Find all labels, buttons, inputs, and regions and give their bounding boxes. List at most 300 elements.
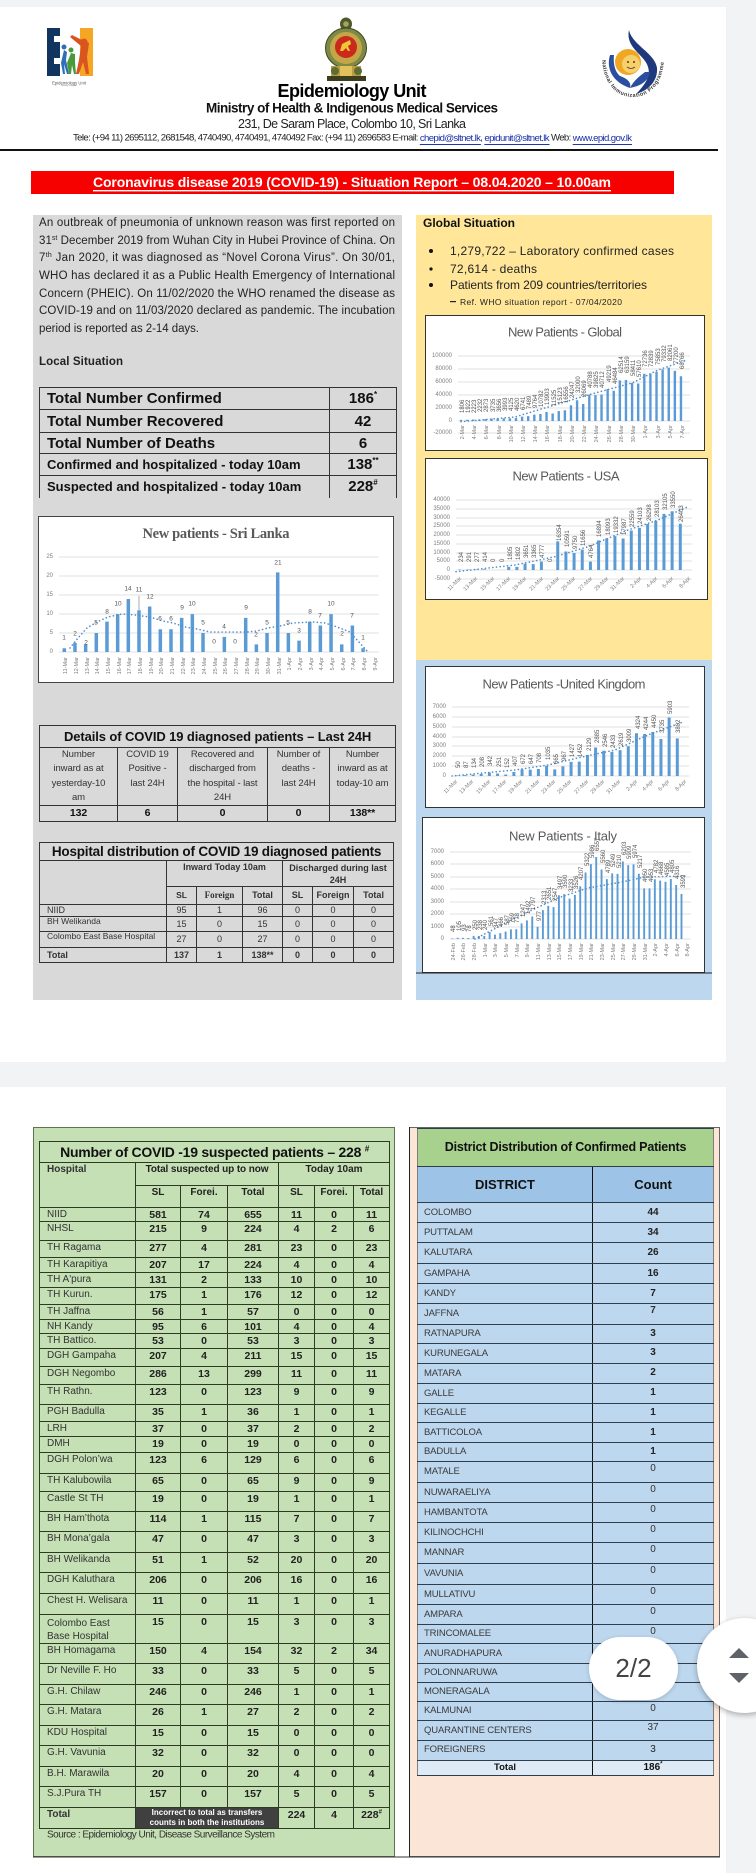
chart: new patients global: 2873 bbox=[484, 398, 490, 412]
chart: new patients global: 11525 bbox=[552, 389, 558, 406]
table: district distribution of confirmed patients: 1 bbox=[650, 1407, 656, 1418]
table: district distribution of confirmed patients: AMPARA bbox=[424, 1609, 463, 1620]
table: suspected patients by hospital: 133 bbox=[244, 1274, 262, 1286]
table: district distribution of confirmed patients: KALUTARA bbox=[424, 1247, 472, 1258]
table: suspected patients by hospital: 176 bbox=[244, 1289, 262, 1301]
table: suspected patients by hospital: TH Ragama bbox=[47, 1242, 101, 1253]
table: district distribution of confirmed patients bbox=[417, 1128, 714, 1776]
text: data source: Source : Epidemiology Unit, Disease Surveillance System bbox=[47, 1830, 275, 1840]
table: headline totals: Total Number Recovered bbox=[47, 412, 223, 430]
chart: new patients United Kingdom: 3000 bbox=[433, 743, 447, 749]
table: district distribution of confirmed patients: 0 bbox=[650, 1645, 656, 1656]
chart: new patients USA: 19-Mar bbox=[512, 576, 528, 592]
table: suspected patients by hospital: 9 bbox=[294, 1475, 299, 1487]
table: suspected patients by hospital: 1 bbox=[369, 1406, 374, 1418]
chart: new patients United Kingdom: 7000 bbox=[433, 704, 447, 710]
chart: new patients Sri Lanka: 9-Apr bbox=[373, 657, 379, 670]
table: district distribution of confirmed patients: 186* bbox=[643, 1761, 663, 1773]
table: details of diagnosed patients last 24H: 132 bbox=[70, 807, 87, 819]
table: suspected patients by hospital: 0 bbox=[331, 1386, 337, 1398]
table: details of diagnosed patients last 24H: today-10 am bbox=[337, 778, 388, 789]
chart: new patients Sri Lanka: 11 bbox=[136, 586, 143, 594]
chart: new patients USA: 10000 bbox=[433, 550, 451, 556]
chart: new patients Italy: 11-Mar bbox=[536, 943, 542, 960]
chart: new patients Italy: 1797 bbox=[531, 896, 537, 910]
chart: new patients global: 72736 bbox=[643, 350, 649, 367]
table: district distribution of confirmed patients: JAFFNA bbox=[424, 1308, 459, 1319]
table: district distribution of confirmed patients: 34 bbox=[647, 1226, 659, 1238]
table: hospital distribution of diagnosed patients: 27 bbox=[176, 934, 186, 944]
table: hospital distribution of diagnosed patients: 15 bbox=[176, 918, 186, 928]
table: suspected patients by hospital: 115 bbox=[245, 1513, 261, 1525]
table: suspected patients by hospital: 52 bbox=[247, 1554, 259, 1566]
table: hospital distribution of diagnosed patients: NIID bbox=[47, 905, 65, 915]
table: district distribution of confirmed patients: 0 bbox=[650, 1684, 656, 1695]
chart: new patients USA bbox=[426, 458, 708, 600]
table: suspected patients by hospital: 2 bbox=[294, 1423, 299, 1435]
chart: new patients Italy: 238 bbox=[478, 919, 484, 930]
table: suspected patients by hospital: 0 bbox=[201, 1595, 207, 1607]
chart: new patients Sri Lanka: 0 bbox=[212, 638, 216, 646]
chart: new patients Italy: 3000 bbox=[431, 899, 445, 905]
chart: new patients United Kingdom: 29-Mar bbox=[590, 779, 606, 795]
chart: new patients global: 13903 bbox=[545, 388, 551, 405]
table: suspected patients by hospital: 37 bbox=[152, 1423, 164, 1435]
chart: new patients USA: 13-Mar bbox=[463, 576, 479, 592]
chart: new patients Sri Lanka: 5 bbox=[286, 620, 290, 626]
chart: new patients Italy: 6557 bbox=[595, 837, 601, 851]
table: suspected patients by hospital: 0 bbox=[331, 1209, 337, 1221]
table: district distribution of confirmed patients: MANNAR bbox=[424, 1547, 464, 1558]
table: suspected patients by hospital: 3 bbox=[294, 1335, 299, 1347]
table: suspected patients by hospital: 11 bbox=[366, 1209, 377, 1221]
chart: new patients USA: 6-Apr bbox=[661, 576, 675, 590]
table: district distribution of confirmed patients: COLOMBO bbox=[424, 1207, 472, 1218]
icon: epidemiology unit logo: Epidemiology Unit bbox=[52, 80, 87, 86]
chart: new patients global: 24247 bbox=[570, 381, 576, 398]
icon: national immunization programme logo: National Immunization Programme bbox=[602, 60, 664, 97]
table: suspected patients by hospital: 20 bbox=[247, 1768, 259, 1780]
chart: new patients USA: 40000 bbox=[433, 497, 451, 503]
table: hospital distribution of diagnosed patients: 96 bbox=[257, 905, 268, 915]
table: suspected patients by hospital: 47 bbox=[247, 1533, 259, 1545]
table: suspected patients by hospital: 11 bbox=[247, 1595, 259, 1607]
table: suspected patients by hospital: 2 bbox=[294, 1706, 299, 1718]
table: hospital distribution of diagnosed patients: 0 bbox=[295, 918, 300, 928]
chart: new patients global: 2-Mar bbox=[460, 425, 466, 439]
chart: new patients Italy: 6000 bbox=[431, 861, 445, 867]
table: hospital distribution of diagnosed patients: 24H bbox=[330, 875, 346, 885]
table: suspected patients by hospital: 65 bbox=[247, 1475, 259, 1487]
chart: new patients global: 6741 bbox=[521, 396, 527, 410]
table: district distribution of confirmed patients: MULLATIVU bbox=[424, 1589, 475, 1600]
icon: up arrow bbox=[729, 1648, 749, 1658]
table: suspected patients by hospital: 2 bbox=[331, 1645, 337, 1657]
chart: new patients USA: 20000 bbox=[433, 532, 451, 538]
panel: country charts background bbox=[416, 660, 712, 1000]
table: hospital distribution of diagnosed patients: BH Welikanda bbox=[47, 916, 101, 926]
table: suspected patients by hospital: TH Kalubowila bbox=[47, 1475, 111, 1486]
table: suspected patients by hospital: 4 bbox=[201, 1645, 207, 1657]
table: district distribution of confirmed patients: ANURADHAPURA bbox=[424, 1648, 502, 1659]
table: suspected patients by hospital: Forei. bbox=[190, 1187, 218, 1198]
chart: new patients global: 75853 bbox=[656, 348, 662, 365]
table: suspected patients by hospital: 32 bbox=[291, 1645, 302, 1657]
table: suspected patients by hospital: 215 bbox=[149, 1223, 167, 1235]
chart: new patients USA: 277 bbox=[475, 551, 481, 562]
chart: new patients Italy: 3497 bbox=[558, 875, 564, 889]
table: suspected patients by hospital: Castle St TH bbox=[47, 1493, 104, 1504]
table: suspected patients by hospital: 0 bbox=[294, 1747, 299, 1759]
table: district distribution of confirmed patients: 0 bbox=[650, 1606, 656, 1617]
chart: new patients Sri Lanka: 5-Apr bbox=[330, 657, 336, 670]
chart: new patients Italy: 6203 bbox=[622, 841, 628, 855]
table: suspected patients by hospital: 0 bbox=[201, 1493, 207, 1505]
table: suspected patients by hospital: 123 bbox=[244, 1386, 262, 1398]
table: suspected patients by hospital: 23 bbox=[366, 1242, 377, 1254]
chart: new patients USA: 10591 bbox=[565, 530, 571, 547]
table: suspected patients by hospital: 0 bbox=[201, 1574, 207, 1586]
chart: new patients global: 68766 bbox=[680, 352, 686, 369]
table: suspected patients by hospital: 9 bbox=[201, 1223, 207, 1235]
chart: new patients Italy: 1000 bbox=[431, 924, 445, 930]
table: suspected patients by hospital: 23 bbox=[291, 1242, 302, 1254]
chart: new patients Sri Lanka: 3 bbox=[297, 628, 301, 634]
table: suspected patients by hospital: DGH Kaluthara bbox=[47, 1574, 115, 1585]
table: hospital distribution of diagnosed patients: 0 bbox=[371, 950, 376, 960]
table: suspected patients by hospital: 7 bbox=[294, 1513, 299, 1525]
chart: new patients USA: 17-Mar bbox=[496, 576, 512, 592]
table: suspected patients by hospital: 286 bbox=[149, 1368, 167, 1380]
chart: new patients United Kingdom: 665 bbox=[554, 753, 560, 764]
chart: new patients global: 4-Mar bbox=[472, 425, 478, 439]
table: district distribution of confirmed patients: KILINOCHCHI bbox=[424, 1527, 484, 1538]
chart: new patients global: 15123 bbox=[558, 387, 564, 404]
table: suspected patients by hospital: 157 bbox=[244, 1788, 262, 1800]
table: suspected patients by hospital: 15 bbox=[152, 1727, 164, 1739]
table: suspected patients by hospital: 13 bbox=[198, 1368, 210, 1380]
chart: new patients Sri Lanka: 2-Apr bbox=[298, 657, 304, 670]
chart: new patients Italy: 6-Apr bbox=[675, 943, 681, 956]
table: suspected patients by hospital: BH Mona’gala bbox=[47, 1533, 110, 1544]
table: headline totals bbox=[39, 387, 397, 498]
table: suspected patients by hospital: 2 bbox=[369, 1423, 374, 1435]
chart: new patients Italy: 13-Mar bbox=[547, 943, 553, 960]
table: suspected patients by hospital: 1 bbox=[294, 1493, 299, 1505]
table: headline totals: 42 bbox=[355, 412, 371, 430]
table: suspected patients by hospital: 15 bbox=[152, 1616, 164, 1628]
table: district distribution of confirmed patients: QUARANTINE CENTERS bbox=[424, 1725, 532, 1736]
table: headline totals: Total Number of Deaths bbox=[47, 434, 215, 452]
panel: district distribution background bbox=[410, 1128, 720, 1856]
table: details of diagnosed patients last 24H: 6 bbox=[145, 807, 150, 819]
chart: new patients Italy: 4789 bbox=[606, 859, 612, 873]
chart: new patients United Kingdom: 967 bbox=[562, 750, 568, 761]
table: district distribution of confirmed patients: 44 bbox=[647, 1206, 659, 1218]
chart: new patients United Kingdom: 2546 bbox=[603, 733, 609, 747]
table: district distribution of confirmed patients: Count bbox=[634, 1177, 672, 1192]
table: suspected patients by hospital: 2 bbox=[369, 1706, 374, 1718]
text: outbreak summary: Concern (PHEIC). On 11/02/2020 the WHO renamed the disease as bbox=[39, 288, 395, 300]
table: suspected patients by hospital: 0 bbox=[331, 1321, 337, 1333]
chart: new patients global: 40000 bbox=[435, 392, 453, 398]
chart: new patients USA: 3651 bbox=[524, 544, 530, 558]
chart: new patients global: 32000 bbox=[576, 376, 582, 393]
table: suspected patients by hospital: 17 bbox=[198, 1259, 210, 1271]
table: district distribution of confirmed patients: 0 bbox=[650, 1565, 656, 1576]
table: district distribution of confirmed patients: 0 bbox=[650, 1544, 656, 1555]
table: suspected patients by hospital: 206 bbox=[244, 1574, 262, 1586]
chart: new patients USA: 25-Mar bbox=[561, 576, 577, 592]
chart: new patients Sri Lanka: 31-Mar bbox=[277, 657, 283, 674]
chart: new patients Italy: 4668 bbox=[659, 861, 665, 875]
table: details of diagnosed patients last 24H: Details of COVID 19 diagnosed patients – Last 24H bbox=[64, 729, 371, 744]
table: district distribution of confirmed patients: 0 bbox=[650, 1484, 656, 1495]
text: address: 231, De Saram Place, Colombo 10, Sri Lanka bbox=[238, 117, 466, 131]
table: district distribution of confirmed patients: 0 bbox=[650, 1586, 656, 1597]
table: district distribution of confirmed patients: HAMBANTOTA bbox=[424, 1507, 488, 1518]
chart: new patients USA: 2-Apr bbox=[629, 576, 643, 590]
table: suspected patients by hospital: 0 bbox=[294, 1306, 299, 1318]
chart: new patients Italy: 29-Mar bbox=[632, 943, 638, 960]
chart: new patients Sri Lanka: 1-Apr bbox=[287, 657, 293, 670]
chart: new patients Sri Lanka: 21 bbox=[274, 560, 282, 566]
table: suspected patients by hospital: 4 bbox=[201, 1350, 207, 1362]
table: details of diagnosed patients last 24H: am bbox=[72, 792, 85, 803]
table: suspected patients by hospital: 2 bbox=[331, 1223, 337, 1235]
chart: new patients Italy: 347 bbox=[494, 917, 500, 928]
table: suspected patients by hospital: 0 bbox=[201, 1727, 207, 1739]
table: suspected patients by hospital: 0 bbox=[331, 1513, 337, 1525]
table: suspected patients by hospital: 19 bbox=[152, 1493, 164, 1505]
table: suspected patients by hospital: 27 bbox=[247, 1706, 259, 1718]
chart: new patients global: 24-Mar bbox=[594, 425, 600, 442]
table: district distribution of confirmed patients: KANDY bbox=[424, 1288, 456, 1299]
table: headline totals: 186* bbox=[349, 390, 377, 407]
chart: new patients USA: 26298 bbox=[647, 504, 653, 521]
table: details of diagnosed patients last 24H: inward as at bbox=[53, 763, 104, 774]
text: outbreak summary: December 2019 from Wuhan City in Hubei Province of China. On bbox=[57, 235, 395, 247]
chart: new patients Italy: 4-Apr bbox=[664, 943, 670, 956]
table: suspected patients by hospital: BH Welikanda bbox=[47, 1554, 110, 1565]
chart: new patients global: 20000 bbox=[435, 405, 453, 411]
table: suspected patients by hospital: 9 bbox=[294, 1386, 299, 1398]
chart: new patients USA: 17987 bbox=[622, 518, 628, 535]
heading: ministry: Ministry of Health & Indigenous Medical Services bbox=[206, 100, 498, 116]
table: suspected patients by hospital: PGH Badulla bbox=[47, 1406, 105, 1417]
chart: new patients USA: 18093 bbox=[606, 518, 612, 535]
table: district distribution of confirmed patients: TRINCOMALEE bbox=[424, 1628, 491, 1639]
table: suspected patients by hospital: 0 bbox=[331, 1438, 337, 1450]
chart: new patients Italy: 2547 bbox=[553, 887, 559, 901]
text: outbreak summary: An outbreak of pneumonia of unknown reason was first reported on bbox=[39, 217, 395, 229]
chart: new patients Italy: 466 bbox=[499, 916, 505, 927]
table: district distribution of confirmed patients: FOREIGNERS bbox=[424, 1744, 485, 1755]
chart: new patients Sri Lanka: 11-Mar bbox=[63, 657, 69, 674]
table: suspected patients by hospital: 4 bbox=[369, 1259, 374, 1271]
table: suspected patients by hospital: 4 bbox=[369, 1768, 374, 1780]
chart: new patients global: 58411 bbox=[631, 359, 637, 376]
table: suspected patients by hospital: SL bbox=[290, 1187, 303, 1198]
chart: new patients Sri Lanka: 25 bbox=[46, 554, 54, 560]
table: suspected patients by hospital: 20 bbox=[366, 1554, 377, 1566]
table: suspected patients by hospital: 224 bbox=[244, 1223, 262, 1235]
chart: new patients USA: -5000 bbox=[435, 576, 451, 582]
table: suspected patients by hospital: 7 bbox=[369, 1513, 374, 1525]
chart: new patients USA: 23-Mar bbox=[545, 576, 561, 592]
chart: new patients United Kingdom: 13-Mar bbox=[459, 779, 475, 795]
table: suspected patients by hospital: 1 bbox=[294, 1595, 299, 1607]
chart: new patients Italy: 3590 bbox=[563, 874, 569, 888]
table: suspected patients by hospital: 37 bbox=[247, 1423, 259, 1435]
chart: new patients global: 1922 bbox=[466, 399, 472, 413]
chart: new patients United Kingdom: 1452 bbox=[578, 743, 584, 757]
chart: new patients United Kingdom: 1427 bbox=[570, 743, 576, 757]
chart: new patients United Kingdom: 2619 bbox=[619, 732, 625, 746]
chart: new patients USA: 0 bbox=[447, 567, 451, 573]
table: suspected patients by hospital: 123 bbox=[149, 1386, 167, 1398]
table: suspected patients by hospital: 206 bbox=[149, 1574, 167, 1586]
chart: new patients USA: New Patients - USA bbox=[512, 468, 620, 484]
chart: new patients Italy: 27-Mar bbox=[621, 943, 627, 960]
table: district distribution of confirmed patients: KEGALLE bbox=[424, 1407, 466, 1418]
chart: new patients Sri Lanka: 8-Apr bbox=[362, 657, 368, 670]
table: suspected patients by hospital: Hospital bbox=[47, 1164, 86, 1175]
chart: new patients global: 4620 bbox=[515, 397, 521, 411]
table: suspected patients by hospital: Total suspected up to now bbox=[146, 1164, 268, 1175]
table: district distribution of confirmed patients: 1 bbox=[650, 1446, 656, 1457]
table: suspected patients by hospital: 11 bbox=[366, 1368, 377, 1380]
chart: new patients Sri Lanka: 21-Mar bbox=[170, 657, 176, 674]
chart: new patients Italy: 5249 bbox=[611, 853, 617, 867]
table: suspected patients by hospital: 211 bbox=[245, 1350, 261, 1362]
table: suspected patients by hospital: 0 bbox=[331, 1533, 337, 1545]
chart: new patients United Kingdom: 3735 bbox=[660, 719, 666, 733]
chart: new patients Italy: 28-Feb bbox=[472, 943, 478, 960]
table: suspected patients by hospital: 101 bbox=[244, 1321, 262, 1333]
chart: new patients United Kingdom: 6-Apr bbox=[657, 779, 671, 793]
table: suspected patients by hospital: 4 bbox=[369, 1321, 374, 1333]
chart: new patients Italy: 4053 bbox=[649, 868, 655, 882]
table: details of diagnosed patients last 24H: discharged from bbox=[189, 763, 256, 774]
table: suspected patients by hospital: 0 bbox=[331, 1274, 337, 1286]
table: details of diagnosed patients last 24H bbox=[39, 725, 396, 822]
table: suspected patients by hospital: 1 bbox=[369, 1686, 374, 1698]
chart: new patients United Kingdom: 4244 bbox=[644, 716, 650, 730]
chart: new patients global: 46484 bbox=[613, 367, 619, 384]
chart: new patients United Kingdom: 27-Mar bbox=[574, 779, 590, 795]
table: suspected patients by hospital: 0 bbox=[331, 1706, 337, 1718]
table: headline totals: 138** bbox=[347, 456, 379, 473]
chart: new patients Sri Lanka: 12 bbox=[146, 594, 154, 600]
chart: new patients Sri Lanka: 23-Mar bbox=[191, 657, 197, 674]
table: suspected patients by hospital: 0 bbox=[201, 1438, 207, 1450]
chart: new patients global: 2223 bbox=[472, 399, 478, 413]
icon: down arrow bbox=[729, 1673, 749, 1683]
list: global situation figures bbox=[429, 244, 674, 307]
table: suspected patients by hospital: 3 bbox=[369, 1335, 374, 1347]
table: suspected patients by hospital: 0 bbox=[331, 1242, 337, 1254]
chart: new patients Italy: 250 bbox=[473, 919, 479, 930]
panel: suspected patients background bbox=[34, 1128, 394, 1856]
table: suspected patients by hospital: 4 bbox=[331, 1809, 337, 1821]
chart: new patients USA: 33550 bbox=[671, 491, 677, 508]
chart: new patients United Kingdom: 19-Mar bbox=[508, 779, 524, 795]
chart: new patients United Kingdom: 2-Apr bbox=[625, 779, 639, 793]
table: suspected patients by hospital: 1 bbox=[201, 1289, 207, 1301]
table: district distribution of confirmed patients: 0 bbox=[650, 1703, 656, 1714]
chart: new patients Italy: 3233 bbox=[569, 878, 575, 892]
table: suspected patients by hospital: Total bbox=[241, 1187, 265, 1198]
table: suspected patients by hospital: 20 bbox=[152, 1768, 164, 1780]
table: details of diagnosed patients last 24H: 0 bbox=[296, 807, 301, 819]
chart: new patients Sri Lanka: 15 bbox=[46, 592, 54, 598]
chart: new patients Italy: 4050 bbox=[643, 868, 649, 882]
table: suspected patients by hospital: 4 bbox=[294, 1259, 299, 1271]
table: suspected patients by hospital: 51 bbox=[152, 1554, 164, 1566]
table: headline totals: 228# bbox=[348, 478, 378, 495]
table: suspected patients by hospital: 1 bbox=[201, 1306, 207, 1318]
chart: new patients USA: 26403 bbox=[679, 505, 685, 522]
table: suspected patients by hospital: 2 bbox=[201, 1274, 207, 1286]
table: suspected patients by hospital: TH A'pura bbox=[47, 1274, 91, 1285]
table: suspected patients by hospital: 224 bbox=[244, 1259, 262, 1271]
chart: new patients USA: 0 bbox=[491, 558, 497, 562]
chart: new patients United Kingdom: 208 bbox=[480, 756, 486, 767]
table: suspected patients by hospital: Total bbox=[47, 1809, 70, 1820]
chart: new patients Sri Lanka: 24-Mar bbox=[202, 657, 208, 674]
table: suspected patients by hospital: 57 bbox=[247, 1306, 259, 1318]
chart: new patients Italy: 17-Mar bbox=[568, 943, 574, 960]
chart: new patients USA: 11-Mar bbox=[447, 576, 463, 592]
chart: new patients Italy: 4207 bbox=[579, 866, 585, 880]
chart: new patients USA: 234 bbox=[459, 551, 465, 562]
table: district distribution of confirmed patients: 3 bbox=[650, 1328, 656, 1339]
chart: new patients Italy: 2313 bbox=[542, 890, 548, 904]
table: suspected patients by hospital: Number of COVID -19 suspected patients – 228 # bbox=[60, 1144, 369, 1160]
table: suspected patients by hospital: 1 bbox=[201, 1554, 207, 1566]
chart: new patients United Kingdom: 4000 bbox=[433, 734, 447, 740]
chart: new patients USA: 24103 bbox=[638, 507, 644, 524]
chart: new patients Sri Lanka: 16-Mar bbox=[117, 657, 123, 674]
chart: new patients United Kingdom: New Patients -United Kingdom bbox=[482, 676, 646, 692]
table: suspected patients by hospital: 5 bbox=[369, 1788, 374, 1800]
chart: new patients Italy: 4316 bbox=[675, 865, 681, 879]
chart: new patients USA: 19332 bbox=[614, 516, 620, 533]
table: suspected patients by hospital: 9 bbox=[369, 1386, 374, 1398]
chart: new patients USA: 32105 bbox=[663, 493, 669, 510]
chart: new patients United Kingdom: 152 bbox=[505, 757, 511, 768]
chart: new patients Sri Lanka: 4-Apr bbox=[319, 657, 325, 670]
chart: new patients United Kingdom: 21-Mar bbox=[525, 779, 541, 795]
chart: new patients United Kingdom: 134 bbox=[472, 757, 478, 768]
table: suspected patients by hospital: 33 bbox=[247, 1665, 259, 1677]
table: district distribution of confirmed patients: 3 bbox=[650, 1744, 656, 1755]
table: suspected patients by hospital: 1 bbox=[294, 1406, 299, 1418]
page 2 sheet bbox=[0, 1087, 726, 1873]
chart: new patients Sri Lanka: 8 bbox=[105, 608, 109, 616]
table: suspected patients by hospital: 0 bbox=[201, 1747, 207, 1759]
chart: new patients Italy: 7000 bbox=[431, 849, 445, 855]
table: suspected patients by hospital: 33 bbox=[152, 1665, 164, 1677]
table: hospital distribution of diagnosed patients: 1 bbox=[217, 905, 222, 915]
chart: new patients global: 26069 bbox=[582, 380, 588, 397]
chart: new patients Sri Lanka: 5 bbox=[201, 620, 205, 626]
table: district distribution of confirmed patients: 16 bbox=[647, 1268, 659, 1278]
chart: new patients Italy: 5560 bbox=[601, 849, 607, 863]
page 1 sheet bbox=[0, 7, 726, 1062]
table: suspected patients by hospital: 3 bbox=[369, 1616, 374, 1628]
